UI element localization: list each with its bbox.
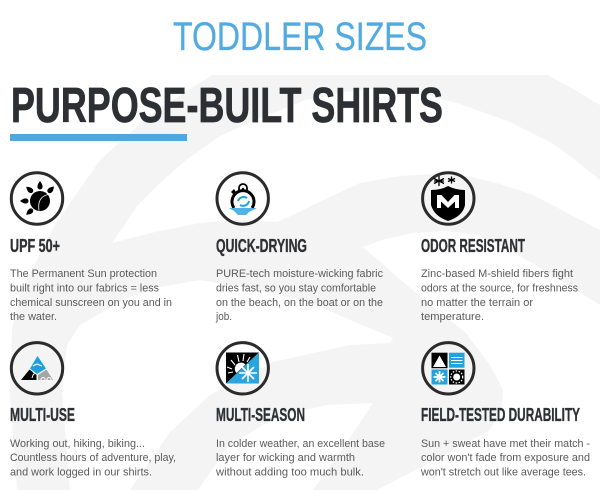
title: PURPOSE-BUILT SHIRTS: [11, 79, 443, 133]
text: odor resistant: no matter the terrain or: [421, 297, 533, 309]
text: UPF 50+: built right into our fabrics = less: [10, 282, 159, 294]
text: quick-drying: PURE-tech moisture-wicking fabric: [216, 268, 383, 280]
text: multi-use: [10, 438, 176, 478]
text: multi-season: In colder weather, an excellent base: [216, 438, 385, 450]
text: multi-season: [215, 438, 385, 478]
panel: multi-season: [215, 343, 385, 478]
text: multi-use: Working out, hiking, biking...: [10, 438, 145, 450]
text: field-tested durability: Sun + sweat have met their match -: [421, 438, 590, 450]
text: UPF 50+: [10, 268, 172, 323]
icon: sun and snowflake square: [217, 343, 268, 394]
text: UPF 50+: the water.: [10, 311, 57, 323]
heading: multi-season: MULTI-SEASON: [216, 404, 305, 425]
panel: UPF 50+: [10, 173, 172, 323]
text: multi-use: Countless hours of adventure, play,: [10, 452, 176, 464]
text: odor resistant: Zinc-based M-shield fibers fight: [421, 268, 574, 280]
icon: stopwatch with water: [217, 173, 268, 224]
text: multi-season: layer for wicking and warmth: [216, 452, 355, 464]
icon: M shield: [423, 173, 474, 224]
icon: sun: [11, 173, 63, 224]
text: field-tested durability: color won't fade from exposure and: [421, 452, 590, 464]
text: quick-drying: dries fast, so you stay comfortable: [216, 282, 376, 294]
heading: quick-drying: QUICK-DRYING: [216, 235, 307, 256]
icon: triathlon triangle: [11, 343, 63, 394]
panel: quick-drying: [215, 173, 383, 323]
title underline: [10, 134, 187, 141]
icon: four-quadrant conditions: [423, 343, 474, 394]
text: multi-season: without adding too much bulk.: [215, 466, 364, 478]
text: UPF 50+: The Permanent Sun protection: [10, 268, 157, 280]
text: UPF 50+: chemical sunscreen on you and in: [10, 297, 172, 309]
heading: toddler sizes: TODDLER SIZES: [173, 15, 427, 59]
heading: UPF 50+: UPF 50+: [10, 235, 60, 256]
panel: multi-use: [10, 343, 176, 478]
text: odor resistant: [421, 268, 578, 323]
text: quick-drying: [215, 268, 383, 323]
panel: field-tested durability: [420, 343, 590, 478]
text: quick-drying: on the beach, on the boat or on the: [216, 297, 383, 309]
text: odor resistant: temperature.: [421, 311, 484, 323]
heading: multi-use: MULTI-USE: [10, 404, 75, 425]
text: field-tested durability: won't stretch out like average tees.: [420, 466, 586, 478]
text: odor resistant: odors at the source, for freshness: [421, 282, 578, 294]
text: multi-use: and work logged in our shirts.: [10, 466, 152, 478]
panel: odor resistant: [421, 173, 578, 323]
text: field-tested durability: [420, 438, 590, 478]
text: quick-drying: job.: [215, 311, 232, 323]
heading: odor resistant: ODOR RESISTANT: [421, 235, 525, 256]
